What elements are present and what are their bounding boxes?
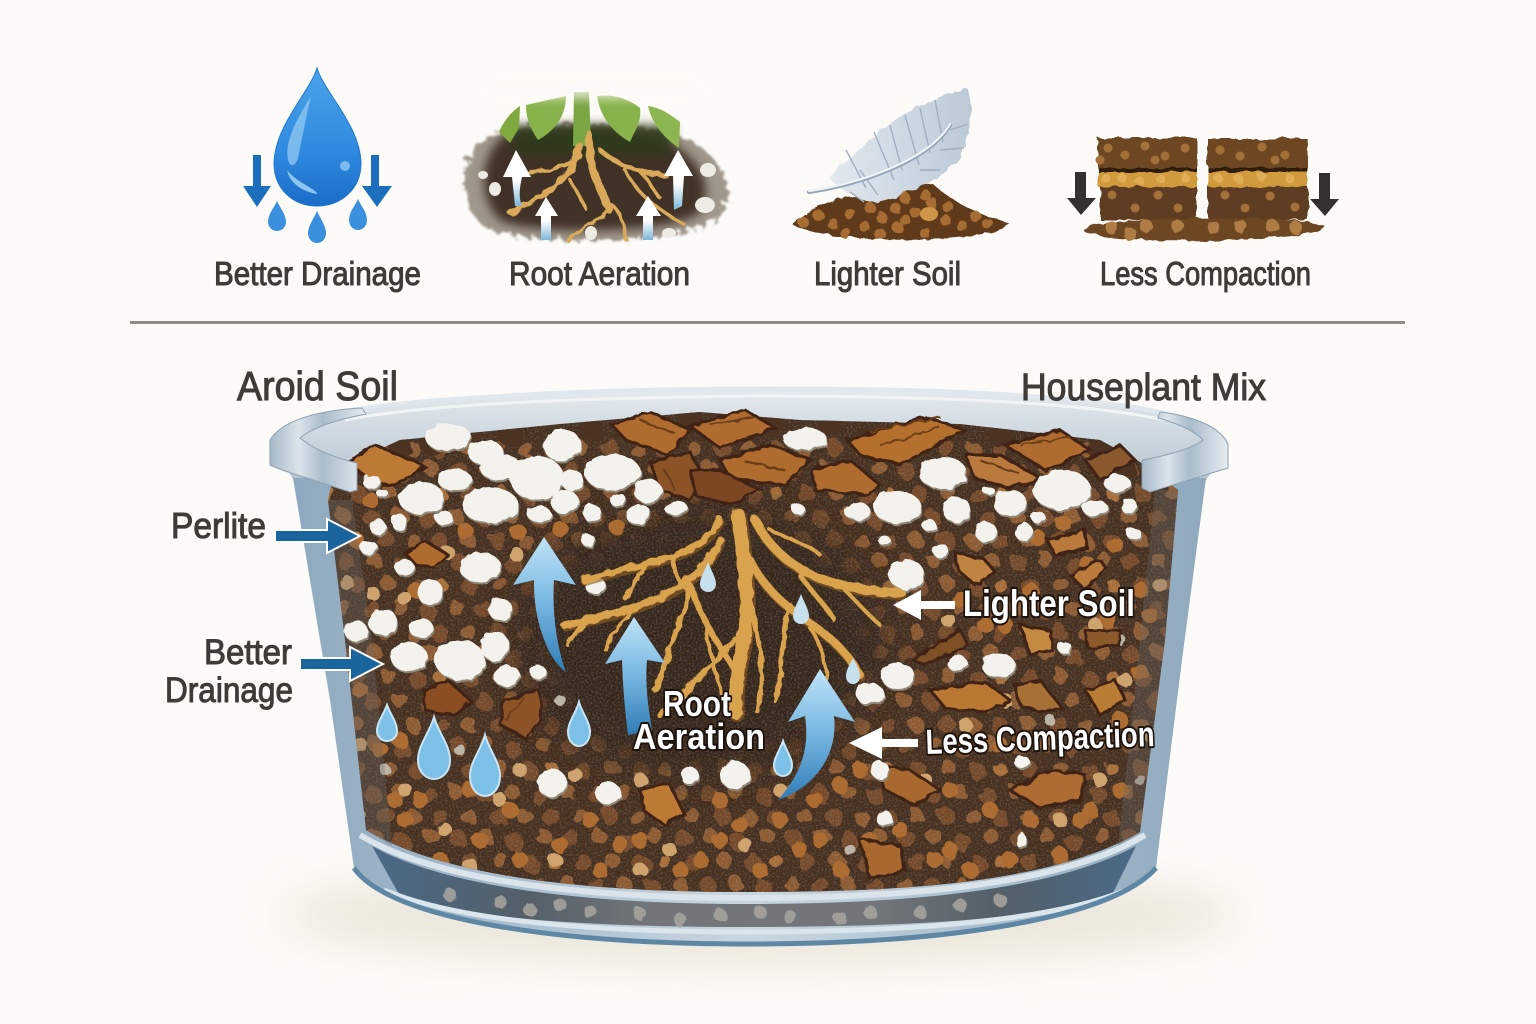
pot back wall [270,388,1228,490]
label: perlite: Perlite [171,505,266,546]
label: less compaction: Less Compaction [1100,255,1311,292]
rubble base [1083,218,1325,241]
soil mass [328,412,1178,892]
arrow right [362,155,392,207]
air arrows [503,150,531,206]
white stones [478,163,716,240]
soil mound halo [464,124,727,240]
label: root aeration callout: Root [663,683,731,724]
arrow: lighter soil [893,590,955,620]
divider [130,321,1405,324]
top fade [490,84,700,98]
arrow: less compaction [849,727,918,759]
pot outer body [293,478,1206,944]
label: better drainage callout [165,633,293,710]
label: less compaction callout: Less Compaction [925,715,1155,762]
arrow left [243,155,271,207]
label: root aeration callout [633,683,765,757]
perlite [344,423,1141,848]
pot rim right tab [1142,412,1228,492]
soil pile [792,184,1010,240]
label: root aeration: Root Aeration [509,255,690,292]
air arrow 3 [778,669,855,800]
roots [510,135,685,240]
left and right soil shading [328,490,1178,846]
roots shadow [566,517,901,714]
perlite shadow [345,425,1142,850]
soil grit [320,410,1190,900]
floor shadow [280,865,1240,965]
arrow: perlite [275,519,360,553]
arrow left [1067,172,1096,215]
icon: better drainage [243,68,392,243]
leaves [499,92,680,148]
orange pebbles [350,500,1150,870]
label: lighter soil callout: Lighter Soil [963,583,1135,624]
air arrow 2 [605,617,665,735]
arrow: better drainage [300,647,383,681]
air arrow 1 [513,537,576,672]
dark root zone [515,505,885,775]
icon: less compaction [1067,138,1339,241]
base band [372,846,1136,927]
heading: aroid soil: Aroid Soil [237,363,398,409]
label: better drainage callout: Drainage [165,671,293,710]
small drops [268,199,367,243]
dark foliage backing [510,125,675,155]
label: better drainage callout: Better [204,633,292,672]
pot rim left tab [270,408,366,492]
water drops [377,702,792,796]
label: better drainage: Better Drainage [214,255,421,292]
pebble texture [1100,146,1295,208]
feather [809,88,971,203]
label: root aeration callout: Aeration [633,716,765,757]
arrow right [1310,173,1339,216]
icon: lighter soil [792,88,1010,240]
pot with soil [270,388,1228,944]
large water drop [274,68,361,206]
tan pebbles [347,553,1160,880]
soil mound [484,128,706,230]
roots [565,515,900,715]
soil blocks [1098,138,1308,220]
heading: houseplant mix: Houseplant Mix [1021,367,1266,409]
icon: root aeration [464,84,727,240]
top soil bumps [400,420,1125,470]
label: lighter soil: Lighter Soil [814,255,961,292]
base pebbles [450,895,1000,920]
orange chunks [1106,177,1290,181]
bark chips [348,410,1135,878]
pebble bed [320,440,1190,900]
small root drops [700,562,860,684]
